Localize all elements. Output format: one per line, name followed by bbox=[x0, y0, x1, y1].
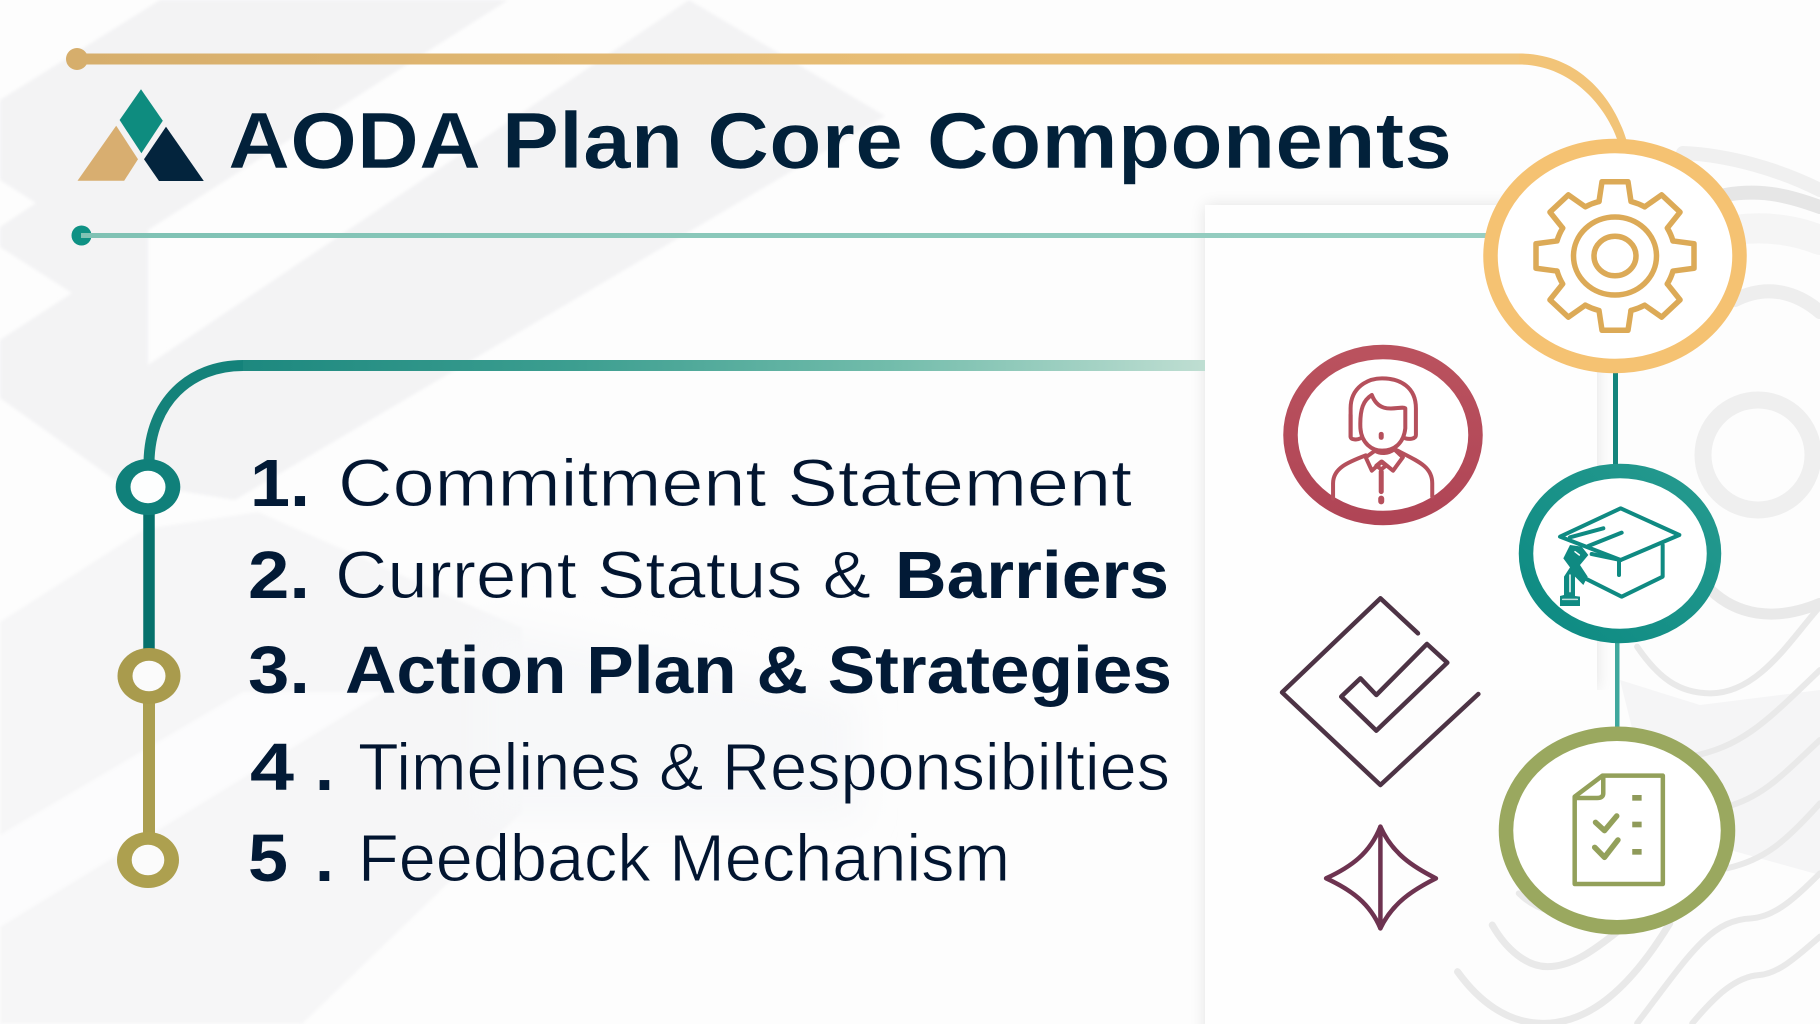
item 3: 3. bbox=[248, 633, 310, 708]
list: core components bbox=[248, 446, 1172, 896]
connector: gear to cap bbox=[1613, 370, 1618, 468]
item 4: . bbox=[315, 730, 334, 805]
item 2: Current Status & bbox=[335, 538, 871, 613]
list timeline connector bbox=[116, 366, 1205, 888]
thin teal line under title bbox=[72, 226, 1491, 246]
connector: cap to checklist bbox=[1615, 640, 1620, 730]
icon: diamond check bbox=[1282, 598, 1478, 785]
icon: graduation cap circle bbox=[1526, 471, 1714, 636]
item 5: 5 bbox=[248, 821, 288, 896]
item 1: 1. bbox=[250, 446, 310, 521]
item 5: . bbox=[315, 821, 334, 896]
item 2 bbox=[248, 538, 1169, 613]
icon: gear circle bbox=[1490, 146, 1740, 366]
decorative wave watermark at right bbox=[1458, 153, 1820, 1023]
item 3: Action Plan & Strategies bbox=[345, 633, 1172, 708]
item 2: 2. bbox=[248, 538, 310, 613]
icon: person with headset circle bbox=[1290, 352, 1476, 518]
node 3 bbox=[118, 648, 180, 704]
item 4: Timelines & Responsibilties bbox=[358, 730, 1170, 805]
item 1: Commitment Statement bbox=[338, 446, 1132, 521]
item 5: Feedback Mechanism bbox=[358, 821, 1010, 896]
panel: right icon card bbox=[1205, 205, 1630, 1024]
node 5 bbox=[117, 832, 179, 888]
node 1 bbox=[116, 459, 180, 515]
title: AODA Plan Core Components bbox=[228, 96, 1452, 185]
icon: AODA logo bbox=[78, 89, 204, 181]
item 2: Barriers bbox=[895, 538, 1169, 613]
icon: checklist document circle bbox=[1506, 734, 1728, 927]
icon: four point star bbox=[1326, 827, 1436, 928]
item 4: 4 bbox=[250, 730, 294, 805]
top gold connector line bbox=[66, 48, 1627, 142]
